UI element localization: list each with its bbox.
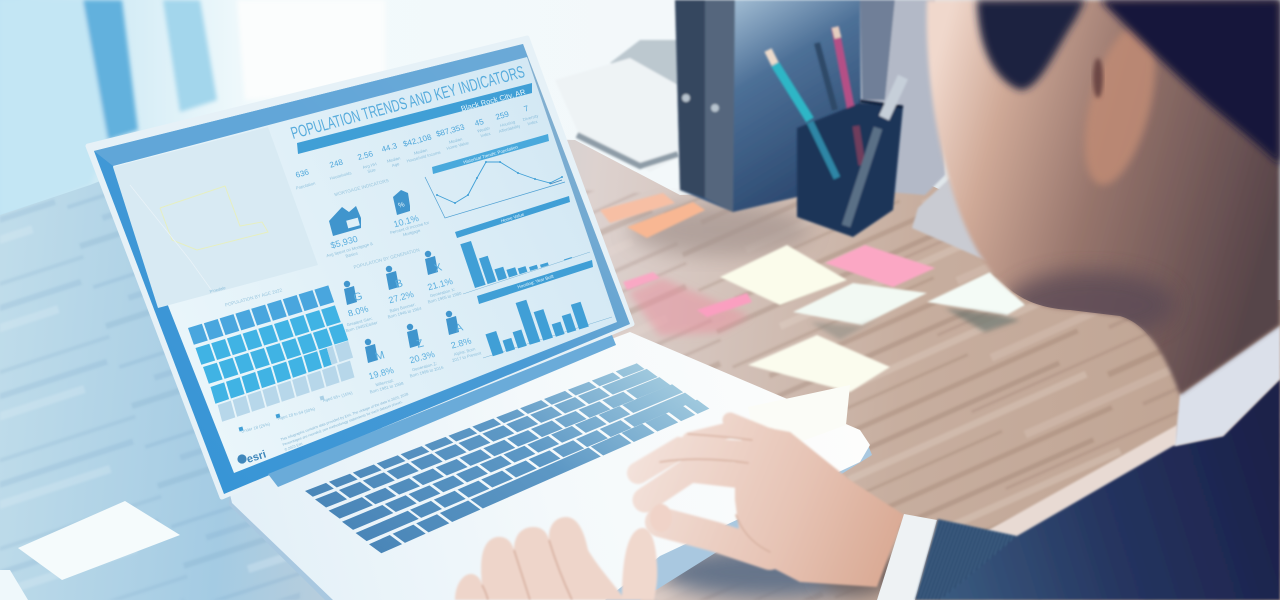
waffle legend: Under 18 (25%) [240,421,271,434]
generation: X [425,251,463,304]
key stats row: Household Income [406,149,442,163]
generation: Z: Born 1999 to 2016 [409,365,445,378]
generation: X: 21.1% [426,276,454,292]
generation: X: Generation X: [429,287,456,298]
waffle legend: Aged 65+ (15%) [322,390,354,403]
key stats row: $42,108 [402,132,433,149]
generation: Boomer: B [394,277,404,291]
key stats row: Age [391,161,401,168]
key stats row: 45 [474,117,485,128]
key stats row [294,104,540,191]
line chart: historical trends population [425,134,565,218]
generation: Greatest [344,281,379,333]
heading: population by generation: POPULATION BY GENERATION [353,247,420,270]
key stats row: 7 [523,104,530,113]
generation: Boomer: Born 1946 to 1964 [387,306,423,319]
generation: Alpha [446,311,482,363]
generation: Greatest: Born 1945/Earlier [345,320,379,333]
generation: Boomer: 27.2% [387,289,415,305]
waffle legend [239,390,354,434]
generation: Z: 20.3% [408,349,436,365]
pencil cup with pencils [768,27,903,237]
generation: Millennial: Born 1981 to 1998 [369,381,405,394]
generation: X: X [433,261,444,275]
paper tucked beside trackpad [748,385,850,442]
key stats row: 2.56 [356,149,375,162]
generation: Z: Z [415,338,425,351]
generation: Alpha: Alpha: Born [453,346,477,357]
key stats row: 248 [328,157,345,170]
title band: Black Rock City, AR [460,87,527,113]
key stats row: Median [448,136,464,145]
left hand fingers [455,517,657,600]
key stats row: Housing [499,119,516,128]
stacked books [912,178,990,262]
title: POPULATION TRENDS AND KEY INDICATORS [289,62,527,143]
hinge strip [268,335,616,487]
window blinds: blue strips [0,0,385,215]
paper card, lower left [18,501,180,580]
white notebook on desk [555,40,678,172]
waffle heading: POPULATION BY AGE 2022 [224,287,283,308]
laptop base [229,332,872,600]
bar chart: housing year built: Housing: Year Built [517,273,555,289]
keyboard [305,363,709,553]
right hand on trackpad [638,420,904,587]
ear [1071,18,1169,192]
stat: mortgage spend: Avg Spent on Mortgage & [326,241,374,258]
shirt cuff [877,514,937,600]
key stats row: Index [527,119,539,126]
map panel: Pinedale [209,285,227,294]
desk edge highlight [985,425,1177,538]
knuckle and finger creases [660,434,770,552]
generation: Millennial: 19.8% [367,365,395,381]
bar chart: housing year built [477,260,612,358]
man's head, seen from behind [927,0,1280,395]
stat: income share for mortgage: Percent of Income for [389,220,430,235]
icon: house with percent: % [397,201,406,210]
generation: Greatest: 8.0% [347,304,370,319]
stat: mortgage spend: $5,930 [329,234,359,250]
bar chart: home value [455,196,590,294]
key stats row: $87,353 [435,122,466,139]
title band [297,83,532,154]
sideburn hair [977,0,1085,90]
binders [675,0,945,212]
generation: Alpha: 2017 to Present [451,350,482,363]
key stats row: Affordability [498,123,522,134]
key stats row: Median [413,147,429,156]
source footnote: This infographic contains data provided by Esri. The vintage of the data is 2023, 2028. [280,392,410,442]
dashboard screen [113,57,617,473]
waffle legend: Ages 18 to 64 (60%) [277,406,316,421]
generation: Z [407,324,445,378]
key stats row: Size [367,167,377,174]
key stats row: Population [295,180,317,191]
paper scrap, bottom corner [0,570,28,600]
source footnote: © 2023 Esri [284,442,303,452]
key stats row: Diversity [522,113,540,122]
shirt collar [1175,325,1280,446]
generation: Z: Generation Z: [411,361,438,372]
waffle chart: population by age [188,285,355,422]
generation: Boomer [386,266,423,319]
generation: Alpha: A [454,321,465,335]
stat: mortgage spend: Basics [345,251,358,259]
stat: mortgage spend [326,234,374,259]
suit jacket and sleeve [915,379,1280,600]
key stats row: Wealth [477,125,491,134]
generation: Millennial: M [374,349,386,363]
top hair [1100,0,1280,165]
key stats row: Median [386,155,402,164]
generation: Millennial: Millennial: [375,378,394,387]
line chart: historical trends population: Historical Trends: Population [463,144,519,165]
sticky notes on desk [600,193,1025,392]
key stats row: 44.3 [380,141,399,154]
generation: Boomer: Baby Boomer: [389,302,416,313]
jaw shadow [1005,271,1175,339]
key stats row: 636 [294,167,311,180]
key stats row: Home Value [446,140,470,151]
icon: house with percent [393,190,410,215]
stat: income share for mortgage: Mortgage [402,228,422,237]
laptop lid with bezel [88,38,632,497]
generation: X: Born 1965 to 1980 [427,291,463,304]
key stats row: 259 [494,109,511,122]
generation: Greatest: G [352,290,364,304]
bar chart: home value: Home Value [500,211,525,224]
heading: mortgage indicators: MORTGAGE INDICATORS [334,178,389,197]
source footnote: Percentages are rounded; see methodology statements for each dataset shown. [282,400,403,447]
stat: income share for mortgage: 10.1% [392,213,420,229]
background: bright window wall [0,0,1280,260]
key stats row: Index [480,131,492,138]
desk surface [0,130,1280,600]
key stats row: Households [329,170,352,181]
generation: Millennial [365,339,405,394]
map panel [113,127,318,308]
generation: Alpha: 2.8% [450,336,473,351]
esri logo: esri [245,449,268,466]
generation: Greatest: Greatest Gen: [346,316,373,327]
key stats row: Avg HH [362,161,377,170]
icon: house with money [329,206,361,236]
stat: income share for mortgage [389,213,430,237]
